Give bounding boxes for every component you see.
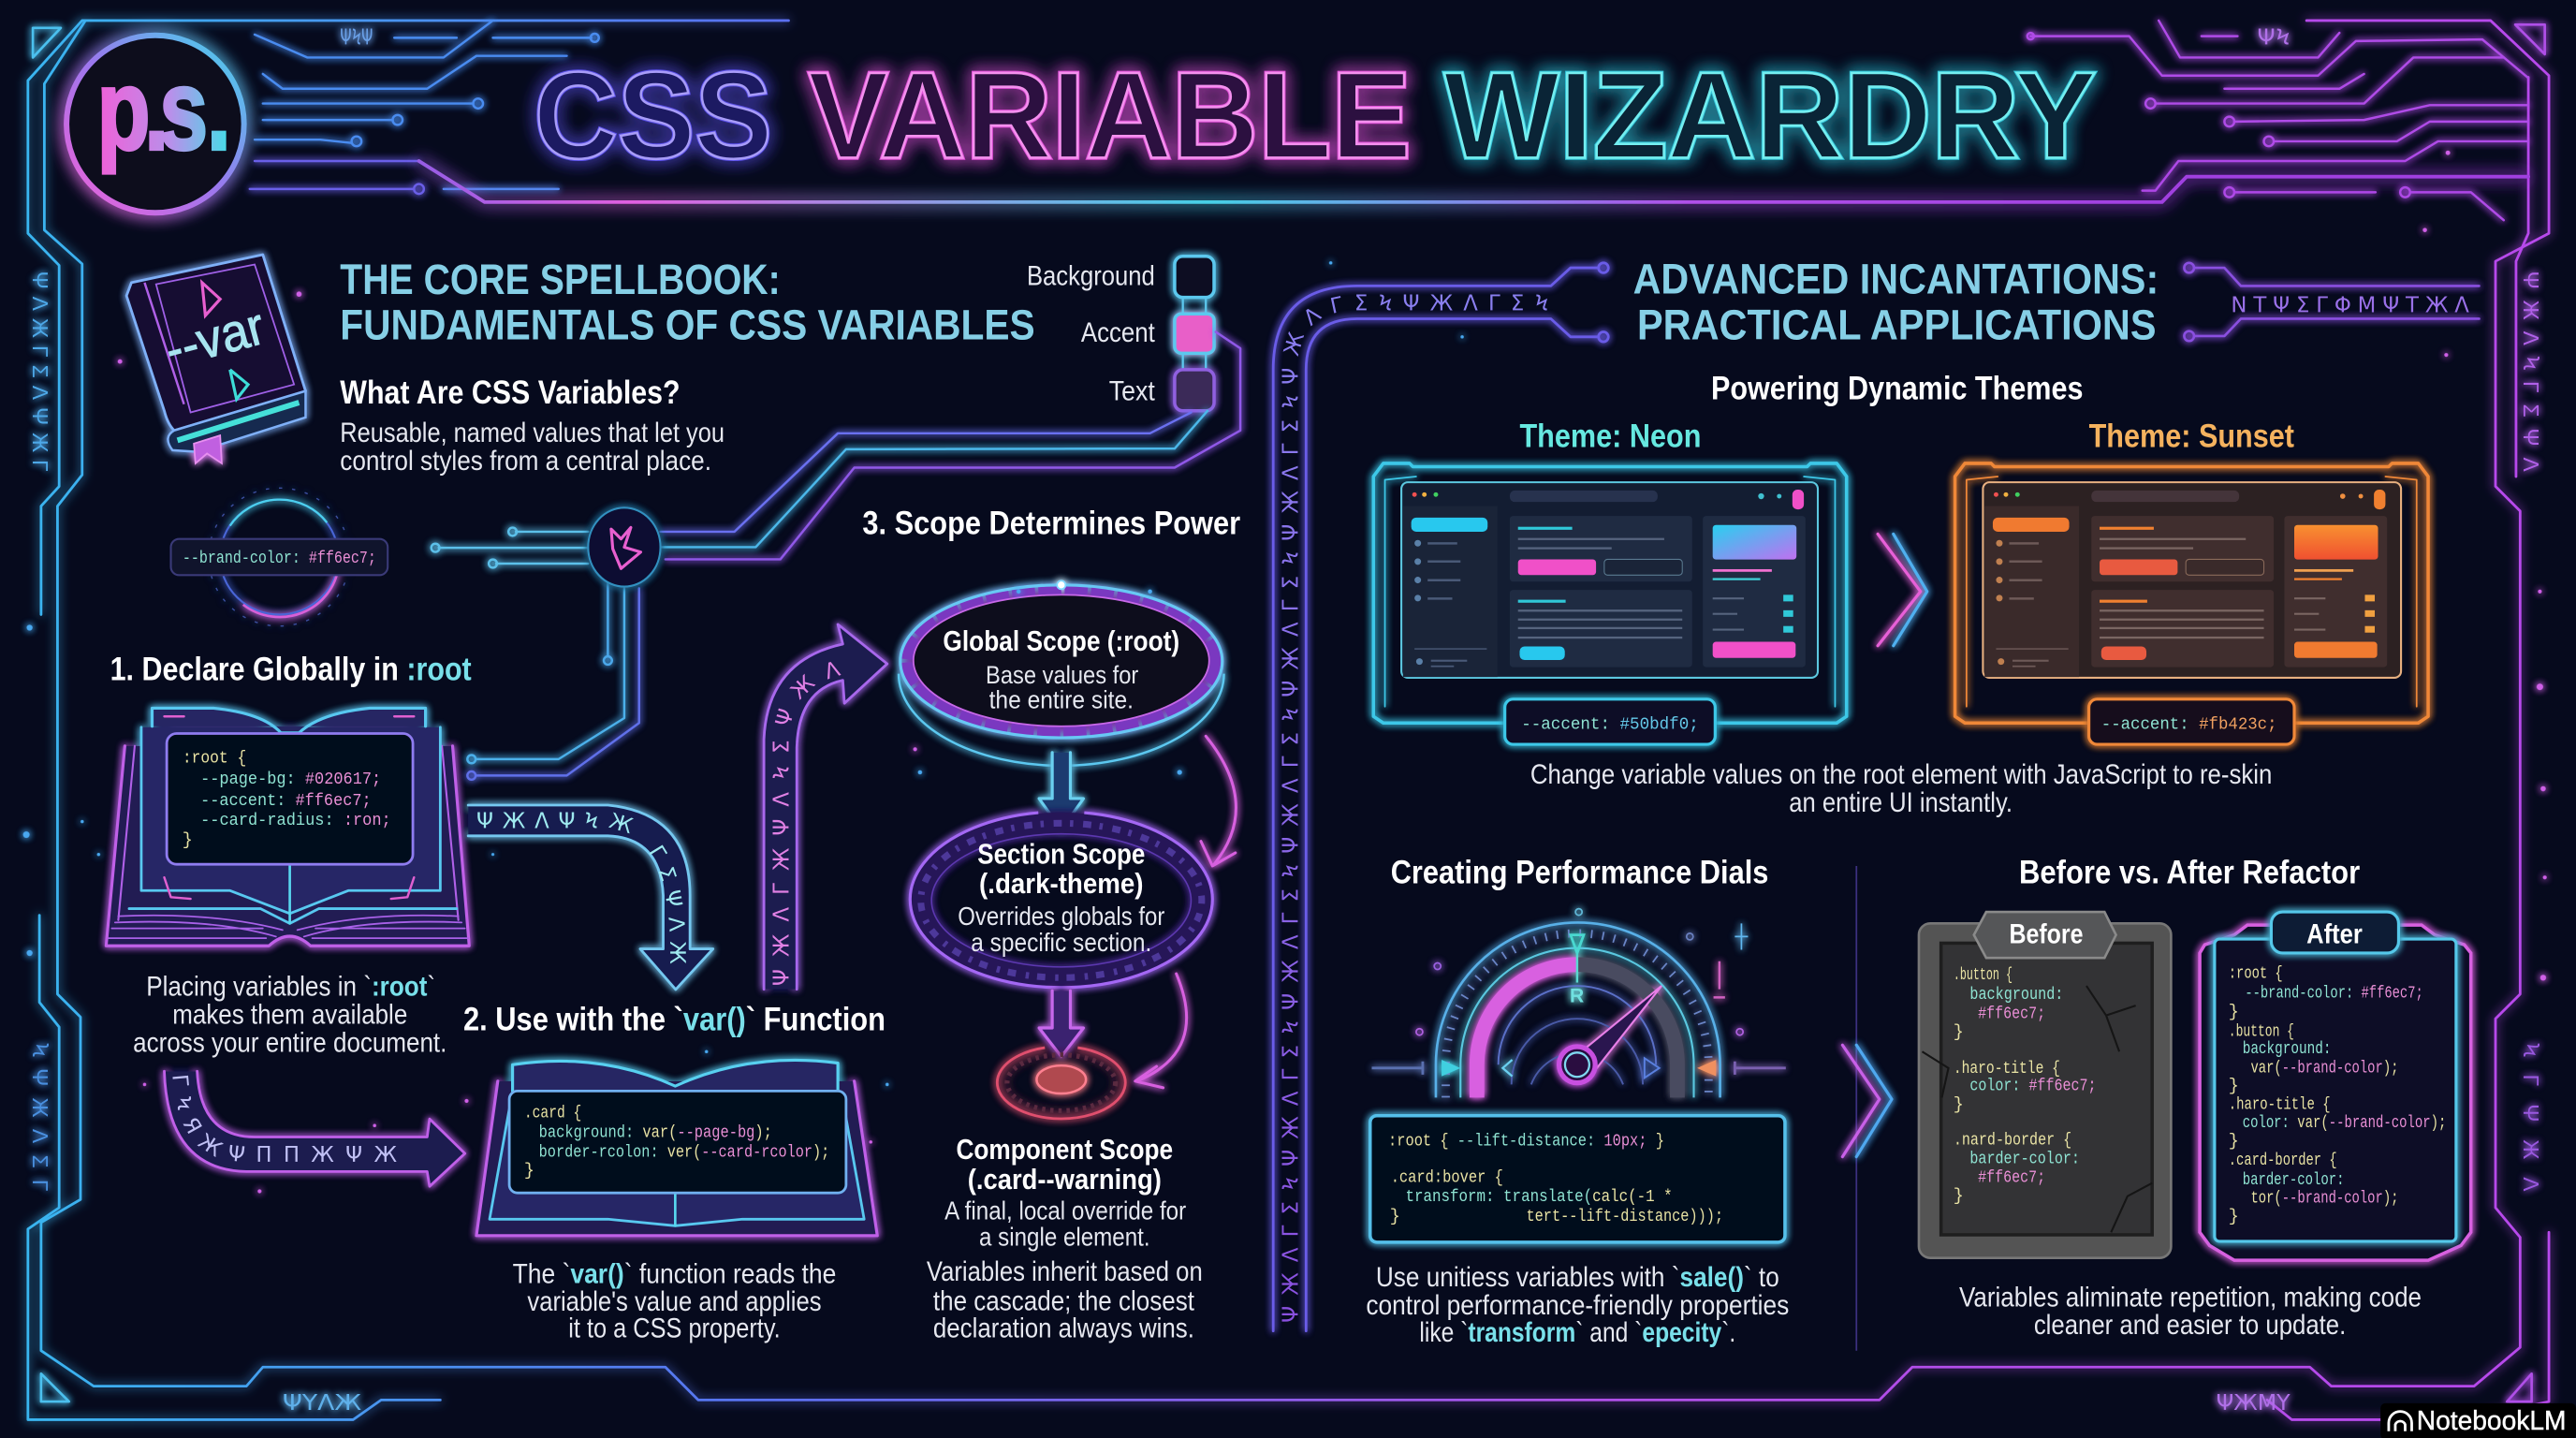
panel: after: var(--brand-color); <box>2250 1058 2398 1078</box>
panel: after: color: var(--brand-color); <box>2243 1113 2446 1133</box>
ring: section scope: Section Scope <box>977 837 1145 870</box>
panel: lift distance code: .card:bover { <box>1391 1168 1503 1188</box>
panel: before: .haro-title { <box>1954 1059 2060 1078</box>
panel: after: After <box>2306 918 2363 949</box>
title: WIZARDRY <box>1444 46 2097 183</box>
heading: dynamic themes: Powering Dynamic Themes <box>1711 370 2083 406</box>
arrow: global to section <box>1039 753 1083 829</box>
rune strip: right of heading: ΝΤΨΣΓΦМΨΤЖΛ <box>2231 293 2469 317</box>
panel: theme neon: Theme: Neon <box>1519 418 1701 454</box>
corner triangles and top/bottom runes: ΨϞΨ <box>340 25 373 50</box>
text: root caption: makes them available <box>172 999 407 1030</box>
arrow: upward to global scope <box>756 618 925 996</box>
text: component scope: the cascade; the closest <box>933 1286 1195 1317</box>
icon: open book with root code: :root { <box>183 748 246 768</box>
text: themes caption <box>1530 759 2272 818</box>
title: WIZARDRY <box>1444 46 2097 183</box>
title: CSS <box>534 46 772 183</box>
text: component scope: A final, local override for <box>944 1196 1186 1225</box>
divider: rune band between columns <box>1236 256 1636 1337</box>
ring: section scope: (.dark-theme) <box>979 867 1144 900</box>
badge: NotebookLM <box>2380 1403 2576 1438</box>
icon: open book with root code: --card-radius: :ron; <box>200 811 391 830</box>
corner triangles and top/bottom runes: ΨЖΜΥ <box>2217 1391 2291 1416</box>
heading: core spellbook: FUNDAMENTALS OF CSS VARIABLES <box>340 301 1035 348</box>
panel: before: } <box>1954 1186 1964 1206</box>
text: component scope: Component Scope <box>956 1133 1173 1166</box>
icon: portal with brand-color pill: --brand-color: #ff6ec7; <box>183 549 376 568</box>
ring: section scope: Overrides globals for <box>958 902 1164 931</box>
panel: before: Before <box>2009 918 2083 949</box>
headings: performance and refactor: Creating Performance Dials <box>1391 854 1768 890</box>
panel: after: .card-border { <box>2229 1151 2337 1170</box>
arrow: chevron neon to sunset <box>1878 534 1927 646</box>
panel: theme sunset: --accent: #fb423c; <box>2101 715 2277 735</box>
text: refactor caption: Variables aliminate repetition, making code <box>1959 1282 2422 1313</box>
panel: before: } <box>1954 1095 1964 1115</box>
panel: before: background: <box>1969 985 2063 1005</box>
panel: lift distance code: } <box>1390 1207 1400 1226</box>
ring: global scope: Global Scope (:root) <box>943 624 1179 657</box>
corner triangles and top/bottom runes: ΨΥΛЖ <box>283 1391 362 1416</box>
panel: theme sunset: Theme: Sunset <box>2089 418 2294 454</box>
decorative particles <box>23 151 2547 1194</box>
text: dials caption: like `transform` and `epecity`. <box>1419 1317 1735 1348</box>
arrow: caption to book two <box>156 1064 472 1193</box>
icon: open book with card code: .card { <box>524 1103 581 1123</box>
side rune strips <box>28 271 2543 1192</box>
icon: open book with root code: --page-bg: #020617; <box>200 770 381 789</box>
arrow: book to var function: ΨЖΛΨϞЖ ΓΣΨΛЖ <box>477 813 686 964</box>
panel: before: } <box>1954 1022 1964 1042</box>
arrow: caption to book two: ΓϞЯЖΨΠΠЖΨЖ <box>172 1075 397 1162</box>
heading: core spellbook <box>340 256 1035 348</box>
text: refactor caption <box>1959 1282 2422 1341</box>
legend: color swatches: Text <box>1109 375 1155 406</box>
heading: advanced incantations <box>1633 255 2159 348</box>
text: themes caption: Change variable values on the root element with JavaScript to re-skin <box>1530 759 2272 790</box>
heading: advanced incantations: ADVANCED INCANTATIONS: <box>1633 255 2159 302</box>
panel: before: .nard-border { <box>1954 1130 2071 1150</box>
text: root caption: Placing variables in `:root` <box>146 972 435 1003</box>
text: what are css variables <box>340 374 724 477</box>
ring: global scope <box>899 580 1224 766</box>
headings: performance and refactor: Before vs. After Refactor <box>2019 854 2360 890</box>
corner triangles and top/bottom runes: ΨϞ <box>2258 25 2291 50</box>
panel: before: #ff6ec7; <box>1978 1004 2045 1023</box>
text: component scope: a single element. <box>979 1222 1150 1251</box>
title: VARIABLE <box>809 46 1412 183</box>
icon: open book with card code: border-rcolon: ver(--card-rcolor); <box>539 1143 829 1163</box>
panel: after: } <box>2229 1077 2239 1096</box>
side rune strips: ΨΛЖΓΣΛΨЖΓ <box>28 271 52 472</box>
arrow: section to component <box>1039 990 1083 1057</box>
panel: after: } <box>2229 1207 2239 1226</box>
text: component scope: Variables inherit based on <box>927 1256 1203 1287</box>
arrows: curved overrides <box>1135 736 1236 1088</box>
panel: lift distance code: :root { --lift-distance: 10px; } <box>1388 1131 1664 1151</box>
icon: open book with card code: background: var(--page-bg); <box>539 1123 772 1143</box>
panel: lift distance code: tert--lift-distance))); <box>1526 1207 1723 1226</box>
badge: NotebookLM: NotebookLM <box>2417 1406 2566 1436</box>
title <box>534 46 2097 183</box>
text: dials caption: control performance-friendly properties <box>1366 1290 1789 1321</box>
rune strip: right of heading <box>2184 263 2479 341</box>
text: component scope: declaration always wins. <box>933 1313 1194 1344</box>
ring: section scope <box>910 813 1212 988</box>
text: dials caption <box>1366 1262 1789 1348</box>
text: component scope <box>927 1133 1203 1344</box>
text: themes caption: an entire UI instantly. <box>1789 787 2012 818</box>
text: dials caption: Use unitiess variables with `sale()` to <box>1376 1262 1779 1293</box>
icon: rune node <box>588 507 661 587</box>
diagram: scope cascade <box>899 580 1236 1119</box>
heading: advanced incantations: PRACTICAL APPLICATIONS <box>1637 301 2157 348</box>
panel: before <box>1919 912 2171 1258</box>
panel: theme sunset <box>1955 418 2428 744</box>
heading: var function: 2. Use with the `var()` Function <box>463 1001 886 1037</box>
panel: before: color: #ff6ec7; <box>1969 1077 2097 1096</box>
panel: theme neon: --accent: #50bdf0; <box>1521 715 1699 735</box>
ring: component scope <box>997 1048 1125 1119</box>
logo: p.s.: p.s. <box>97 46 231 175</box>
text: var caption: it to a CSS property. <box>568 1313 781 1344</box>
icon: open book with root code <box>106 708 469 946</box>
panel: after <box>2200 912 2471 1260</box>
arrow: book to var function <box>462 798 719 996</box>
panel: before: .button { <box>1954 965 2012 985</box>
text: refactor caption: cleaner and easier to update. <box>2034 1310 2346 1341</box>
panel: before: barder-color: <box>1969 1150 2080 1169</box>
side rune strips: ϞΓΨЖΛ <box>2519 1043 2543 1192</box>
ring: section scope: a specific section. <box>971 928 1151 957</box>
icon: open book with card code: } <box>524 1161 534 1181</box>
text: what are css variables: What Are CSS Variables? <box>340 374 681 411</box>
arrow: upward to global scope: ΨЖΛΓЖΨΛϞΣΨЖΛ <box>773 662 841 985</box>
text: component scope: (.card--warning) <box>968 1163 1162 1196</box>
icon: --var spellbook: --var <box>158 296 271 379</box>
panel: theme neon <box>1373 418 1847 744</box>
ui mock: neon <box>1403 490 1806 677</box>
icon: open book with card code <box>476 1060 877 1236</box>
text: what are css variables: Reusable, named values that let you <box>340 418 724 448</box>
heading: core spellbook: THE CORE SPELLBOOK: <box>340 256 781 303</box>
ui mock: sunset <box>1984 490 2387 677</box>
legend: color swatches: Background <box>1027 261 1155 292</box>
panel: after: barder-color: <box>2243 1170 2345 1190</box>
panel: after: } <box>2229 1131 2239 1151</box>
panel: before: #ff6ec7; <box>1978 1168 2045 1188</box>
header circuits: left <box>250 21 599 194</box>
icon: open book with root code: --accent: #ff6ec7; <box>200 791 372 811</box>
panel: after: .haro-title { <box>2229 1095 2331 1115</box>
connector circuits: node to swatches and book <box>432 332 1240 780</box>
icon: portal with brand-color pill <box>171 488 388 626</box>
text: var caption <box>513 1259 836 1344</box>
ring: global scope: the entire site. <box>989 684 1134 713</box>
panel: after: .button { <box>2229 1022 2294 1042</box>
panel: lift distance code <box>1370 1116 1785 1242</box>
panel: after: :root { <box>2229 963 2283 983</box>
panel: after: background: <box>2243 1039 2331 1059</box>
gauge: performance dial: R <box>1570 986 1584 1007</box>
headings: performance and refactor <box>1391 854 2360 890</box>
legend: color swatches <box>1027 257 1214 411</box>
divider: rune band between columns: ΨЖΛΓΣϞΨЖΛΓΣϞΨЖΛΓΣϞΨЖΛΓΣϞΨЖΛΓΣϞΨЖΛΓΣϞΨЖΛΓΣϞΨЖΛΓΣϞ <box>1282 294 1548 1322</box>
text: root caption <box>133 972 446 1058</box>
text: root caption: across your entire document. <box>133 1027 446 1058</box>
title: VARIABLE <box>809 46 1412 183</box>
text: what are css variables: control styles from a central place. <box>340 446 711 477</box>
header divider line <box>419 161 2528 202</box>
panel: after: tor(--brand-color); <box>2250 1189 2398 1209</box>
logo: p.s. <box>66 36 244 213</box>
gauge: performance dial <box>1372 909 1786 1097</box>
side rune strips: ϞΨЖΛΣΓ <box>28 1043 52 1191</box>
arrow: chevron before to after <box>1842 1045 1892 1157</box>
panel: lift distance code: transform: translate(calc(-1 * <box>1405 1187 1673 1207</box>
icon: --var spellbook <box>126 255 305 463</box>
text: var caption: The `var()` function reads the <box>513 1259 836 1290</box>
panel: after: --brand-color: #ff6ec7; <box>2245 983 2423 1003</box>
panel: after: } <box>2229 1003 2239 1022</box>
side rune strips: ΨЖΛϞΓΣΨΛ <box>2519 271 2543 472</box>
text: var caption: variable's value and applies <box>527 1286 822 1317</box>
header circuits: right <box>2027 21 2528 220</box>
ring: global scope: Base values for <box>986 660 1138 689</box>
heading: scope: 3. Scope Determines Power <box>862 505 1240 541</box>
legend: color swatches: Accent <box>1081 317 1155 348</box>
title: CSS <box>534 46 772 183</box>
icon: open book with root code: } <box>183 830 193 850</box>
heading: declare globally: 1. Declare Globally in :root <box>110 652 472 688</box>
